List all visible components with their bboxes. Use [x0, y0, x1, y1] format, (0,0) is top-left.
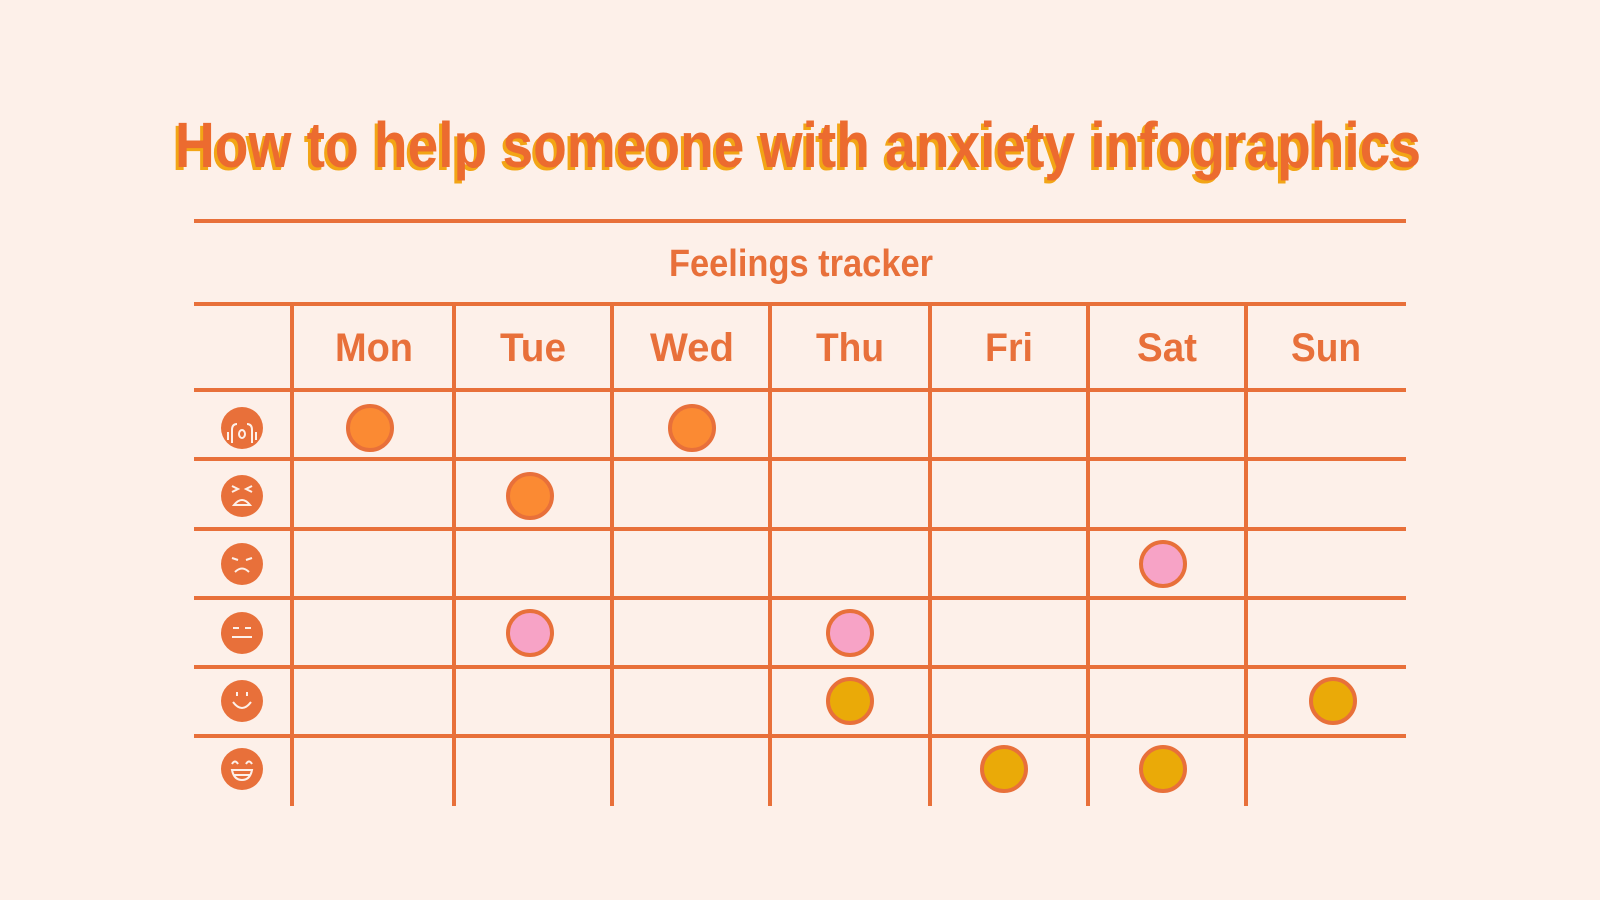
- mood markers: [348, 406, 1355, 791]
- icon: grinning face: [221, 748, 263, 790]
- icon: neutral face: [221, 612, 263, 654]
- day headers: Mon: [335, 326, 413, 370]
- day headers: Tue: [500, 326, 566, 370]
- icon: happy face: [221, 680, 263, 722]
- title: How to help someone with anxiety infographics: [175, 109, 1421, 181]
- table grid: [194, 221, 1406, 806]
- icon: crying face: [221, 407, 263, 449]
- day headers: Sat: [1137, 326, 1197, 370]
- day headers: Thu: [816, 326, 884, 370]
- icon: sad face: [221, 543, 263, 585]
- subtitle: Feelings tracker: Feelings tracker: [669, 243, 933, 285]
- day headers: Wed: [650, 326, 734, 370]
- title: How to help someone with anxiety infographics: [172, 112, 1418, 184]
- day headers: Fri: [985, 326, 1033, 370]
- day headers: [335, 326, 1361, 370]
- day headers: Sun: [1291, 326, 1361, 370]
- icon: distressed face: [221, 475, 263, 517]
